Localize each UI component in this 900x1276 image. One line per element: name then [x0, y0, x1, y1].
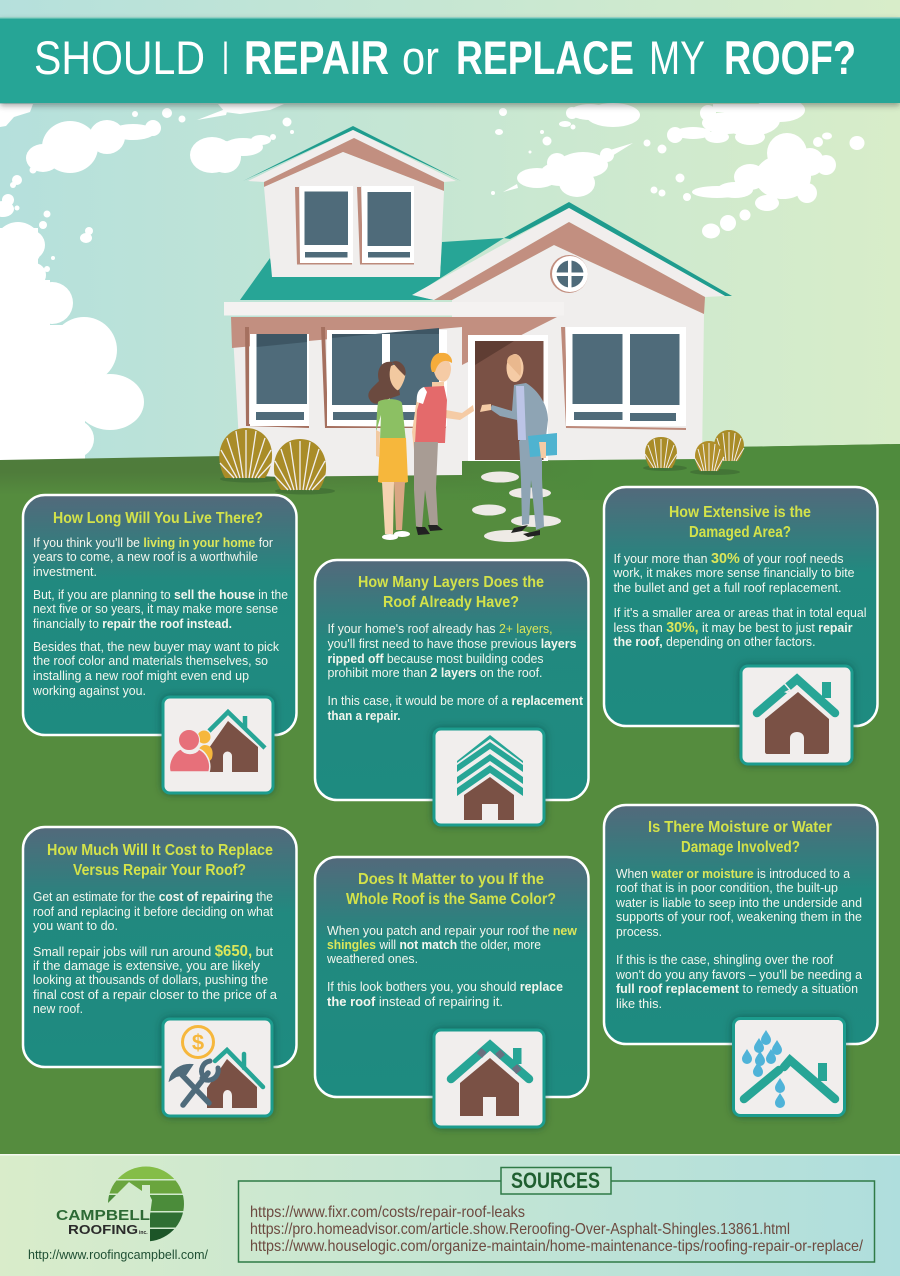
inc: inc. — [139, 1230, 148, 1236]
body text: If your more than 30% of your roof needs — [614, 550, 844, 567]
body text: next five or so years, it may make more sense — [33, 601, 278, 616]
icon: coin, tools and house — [163, 1019, 272, 1116]
heading: Does It Matter to you If the — [358, 871, 544, 888]
body text: won't do you any favors – you'll be needing a — [615, 967, 863, 982]
body text: new roof. — [33, 1001, 83, 1016]
body text: like this. — [616, 996, 662, 1011]
lower wall — [232, 245, 704, 477]
body text — [32, 535, 288, 698]
body text: prohibit more than 2 layers on the roof. — [328, 665, 542, 680]
panel: how extensive is the damaged area — [604, 487, 878, 726]
body text: the roof color and materials themselves, so — [33, 653, 268, 668]
body text: When water or moisture is introduced to a — [616, 866, 851, 881]
heading — [669, 504, 811, 541]
heading: Damage Involved? — [681, 839, 800, 856]
main roof — [240, 238, 504, 300]
left window — [245, 327, 309, 428]
sources label: SOURCES — [511, 1168, 600, 1193]
body text: Get an estimate for the cost of repairing the — [33, 889, 273, 904]
right window — [561, 327, 686, 430]
body text: financially to repair the roof instead. — [33, 616, 232, 631]
title: ROOF? — [724, 31, 856, 84]
heading: Roof Already Have? — [383, 594, 519, 611]
body text: if the damage is extensive, you are likely — [33, 958, 260, 973]
source links: https://www.fixr.com/costs/repair-roof-leaks — [250, 1204, 525, 1221]
title: REPAIR — [244, 31, 389, 84]
body text — [613, 550, 867, 649]
center window — [321, 327, 447, 428]
body text: the roof, depending on other factors. — [614, 634, 816, 649]
body text: roof and replacing it before deciding on what — [33, 904, 273, 919]
icon: cracked roof house — [741, 666, 852, 764]
upper gable — [243, 126, 461, 277]
tools — [170, 1061, 218, 1105]
agent — [480, 354, 557, 537]
body text: ripped off because most building codes — [328, 651, 544, 666]
sky background — [0, 0, 900, 470]
people — [368, 353, 557, 540]
panel: does it matter if the whole roof is the same color — [315, 857, 588, 1097]
heading — [47, 842, 273, 879]
body text: supports of your roof, weakening them in the — [616, 909, 862, 924]
title: or — [402, 31, 439, 84]
company name: CAMPBELL — [56, 1208, 150, 1224]
title: MY — [649, 31, 705, 84]
porch shade — [231, 317, 557, 365]
porch band — [224, 302, 564, 316]
water drops — [742, 1030, 785, 1108]
footer background — [0, 1154, 900, 1276]
title — [34, 31, 856, 84]
logo mark — [108, 1166, 184, 1242]
source links — [250, 1204, 863, 1255]
panel: how many layers — [315, 560, 588, 800]
body text: installing a new roof might even end up — [33, 668, 249, 683]
round window — [550, 255, 588, 293]
title: I — [222, 31, 229, 84]
icon: people and house — [163, 697, 273, 793]
panel: how long will you live there — [23, 495, 296, 735]
main gable — [412, 202, 732, 314]
heading: Whole Roof is the Same Color? — [346, 891, 556, 908]
body text: If your home's roof already has 2+ layers, — [328, 621, 552, 636]
heading: How Much Will It Cost to Replace — [47, 842, 273, 859]
body text: work, it makes more sense financially to bite — [613, 565, 854, 580]
body text: working against you. — [32, 683, 146, 698]
body text: you want to do. — [33, 918, 118, 933]
body text: years to come, a new roof is a worthwhile — [33, 549, 258, 564]
body text: the roof instead of repairing it. — [327, 994, 503, 1009]
body text: In this case, it would be more of a replacement — [328, 693, 584, 708]
body text: Small repair jobs will run around $650, but — [33, 943, 273, 960]
body text: looking at thousands of dollars, pushing the — [33, 972, 268, 987]
company name second line: ROOFING — [68, 1222, 138, 1237]
bushes — [219, 428, 744, 494]
body text: weathered ones. — [326, 951, 418, 966]
heading: How Long Will You Live There? — [53, 510, 263, 527]
source links: https://pro.homeadvisor.com/article.show.Reroofing-Over-Asphalt-Shingles.13861.html — [250, 1221, 790, 1238]
body text: the bullet and get a full roof replacement. — [614, 580, 842, 595]
body text: If it's a smaller area or areas that in total equal — [614, 605, 867, 620]
body text: than a repair. — [328, 708, 400, 723]
woman — [368, 361, 410, 540]
heading — [648, 819, 832, 856]
ground — [0, 444, 900, 1156]
body text: Besides that, the new buyer may want to pick — [33, 639, 279, 654]
title: SHOULD — [34, 31, 205, 84]
house — [224, 126, 732, 477]
body text: If this look bothers you, you should replace — [327, 979, 563, 994]
body text — [328, 621, 584, 723]
body text — [326, 923, 578, 1009]
body text: water is liable to seep into the underside and — [615, 895, 862, 910]
heading: Versus Repair Your Roof? — [73, 862, 246, 879]
website url: http://www.roofingcampbell.com/ — [28, 1247, 208, 1262]
body text: When you patch and repair your roof the new — [327, 923, 578, 938]
clouds — [0, 98, 864, 460]
panel: moisture or water damage — [604, 805, 878, 1044]
icon: patched roof house — [434, 1030, 544, 1127]
coin: $ — [192, 1030, 204, 1055]
upper windows — [295, 186, 414, 264]
heading — [346, 871, 556, 908]
heading: Is There Moisture or Water — [648, 819, 832, 836]
body text: you'll first need to have those previous layers — [328, 636, 576, 651]
body text: full roof replacement to remedy a situation — [616, 981, 858, 996]
panel: sources — [238, 1168, 874, 1262]
body text: investment. — [33, 564, 97, 579]
panel: how much will it cost — [23, 827, 296, 1067]
icon: water through cracked roof — [734, 1018, 844, 1116]
body text: But, if you are planning to sell the house in the — [33, 587, 288, 602]
heading: How Many Layers Does the — [358, 574, 544, 591]
body text: final cost of a repair closer to the price of a — [33, 987, 278, 1002]
body text: shingles will not match the older, more — [327, 937, 541, 952]
body text — [33, 889, 278, 1016]
body text: roof that is in poor condition, the built-up — [616, 880, 838, 895]
young man — [412, 353, 474, 535]
body text: If you think you'll be living in your home for — [33, 535, 274, 550]
heading — [358, 574, 544, 611]
body text: less than 30%, it may be best to just repair — [614, 619, 852, 636]
body text: process. — [616, 924, 662, 939]
title banner — [0, 17, 900, 103]
body text — [615, 866, 863, 1011]
heading: How Extensive is the — [669, 504, 811, 521]
logo — [28, 1165, 208, 1262]
stepping stones — [472, 472, 561, 542]
door — [468, 335, 548, 461]
title: REPLACE — [456, 31, 634, 84]
body text: If this is the case, shingling over the roof — [616, 952, 833, 967]
heading: Damaged Area? — [689, 524, 791, 541]
icon: layered roof — [434, 729, 544, 825]
